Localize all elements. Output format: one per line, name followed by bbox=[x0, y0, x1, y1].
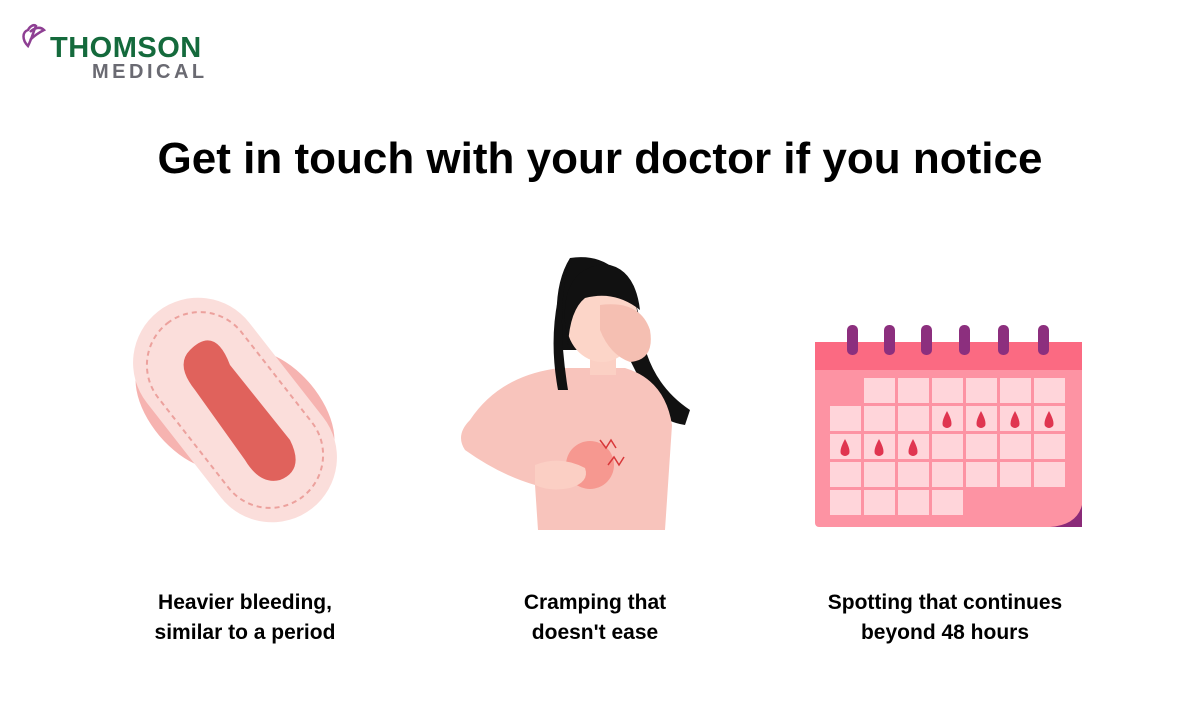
hand on face bbox=[600, 304, 651, 362]
icon: sanitary pad bbox=[133, 298, 337, 522]
caption: heavier bleeding: similar to a period bbox=[155, 621, 335, 644]
hand on belly bbox=[535, 461, 586, 489]
hair front bbox=[565, 264, 640, 345]
logo text: THOMSON bbox=[50, 32, 202, 64]
caption: heavier bleeding bbox=[155, 591, 335, 644]
caption: cramping: doesn't ease bbox=[532, 621, 658, 644]
neck & face bbox=[590, 345, 616, 375]
icon: calendar bbox=[815, 325, 1082, 527]
icon: woman with cramps bbox=[461, 257, 690, 530]
caption: heavier bleeding: Heavier bleeding, bbox=[158, 591, 332, 614]
caption: spotting: beyond 48 hours bbox=[861, 621, 1029, 644]
caption: cramping: Cramping that bbox=[524, 591, 666, 614]
title: Get in touch with your doctor if you notice bbox=[158, 134, 1042, 183]
caption: spotting: Spotting that continues bbox=[828, 591, 1062, 614]
caption: cramping bbox=[524, 591, 666, 644]
hair back bbox=[557, 257, 690, 425]
logo: MEDICAL bbox=[92, 61, 208, 83]
logo bbox=[22, 24, 208, 83]
shirt bbox=[461, 368, 672, 530]
caption: spotting bbox=[828, 591, 1062, 644]
icon: butterfly heart bbox=[22, 24, 46, 48]
